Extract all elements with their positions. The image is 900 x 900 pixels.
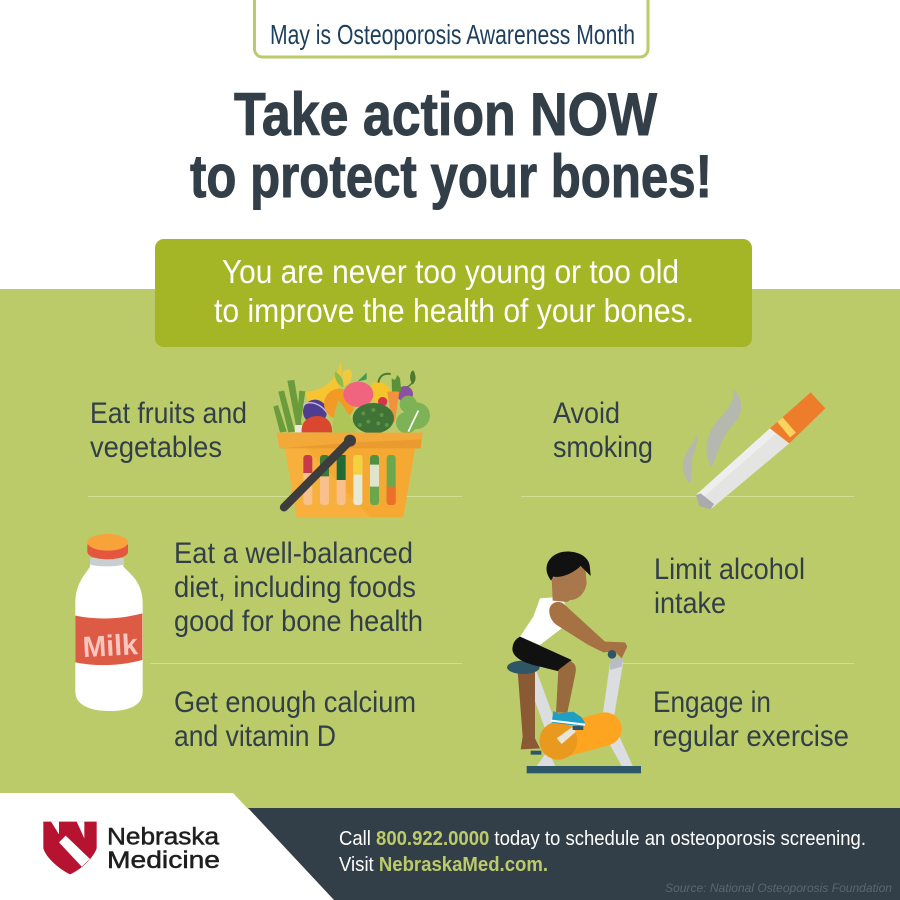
text: avoid smoking: Avoid	[553, 397, 620, 430]
text: calcium and vitamin D: Get enough calcium	[174, 686, 416, 719]
logo: Nebraska Medicine: Medicine	[107, 847, 220, 874]
icon: basket of fruits and vegetables	[273, 361, 430, 517]
top banner: May is Osteoporosis Awareness Month	[270, 19, 635, 50]
source note: Source: National Osteoporosis Foundation	[665, 881, 892, 895]
text: well-balanced diet: diet, including foods	[174, 571, 416, 604]
text: well-balanced diet	[174, 537, 423, 638]
icon: cigarette	[683, 388, 825, 509]
icon: person on exercise bike	[507, 552, 641, 773]
footer text	[339, 828, 866, 876]
text: avoid smoking: smoking	[553, 431, 653, 464]
text: calcium and vitamin D	[174, 686, 416, 753]
callout: never too young: to improve the health of your bones.	[214, 292, 694, 329]
text: eat fruits and vegetables	[90, 397, 247, 464]
top banner	[254, 0, 648, 57]
icon: milk bottle	[75, 534, 143, 711]
text: limit alcohol	[654, 553, 805, 620]
white logo area	[0, 793, 334, 900]
callout: never too young	[155, 239, 752, 347]
green background panel	[0, 289, 900, 809]
dark footer band	[248, 808, 900, 900]
logo: Nebraska Medicine: Nebraska	[107, 824, 220, 850]
title: to protect your bones!	[190, 143, 712, 210]
text: limit alcohol: intake	[654, 587, 726, 620]
callout: never too young: You are never too young or too old	[222, 253, 679, 290]
text: avoid smoking	[553, 397, 653, 464]
footer text: Call 800.922.0000 today to schedule an osteoporosis screening.	[339, 828, 866, 850]
text: limit alcohol: Limit alcohol	[654, 553, 805, 586]
icon: milk bottle: Milk	[82, 628, 139, 664]
text: eat fruits and vegetables: vegetables	[90, 431, 222, 464]
text: calcium and vitamin D: and vitamin D	[174, 720, 336, 753]
text: regular exercise: Engage in	[653, 686, 771, 719]
text: well-balanced diet: good for bone health	[174, 605, 423, 638]
text: well-balanced diet: Eat a well-balanced	[174, 537, 413, 570]
logo: Nebraska Medicine	[43, 822, 220, 874]
text: regular exercise	[653, 686, 849, 753]
text: regular exercise: regular exercise	[653, 720, 849, 753]
footer text: Visit NebraskaMed.com.	[339, 854, 548, 876]
title: Take action NOW	[234, 81, 657, 148]
text: eat fruits and vegetables: Eat fruits and	[90, 397, 247, 430]
title	[190, 81, 712, 210]
